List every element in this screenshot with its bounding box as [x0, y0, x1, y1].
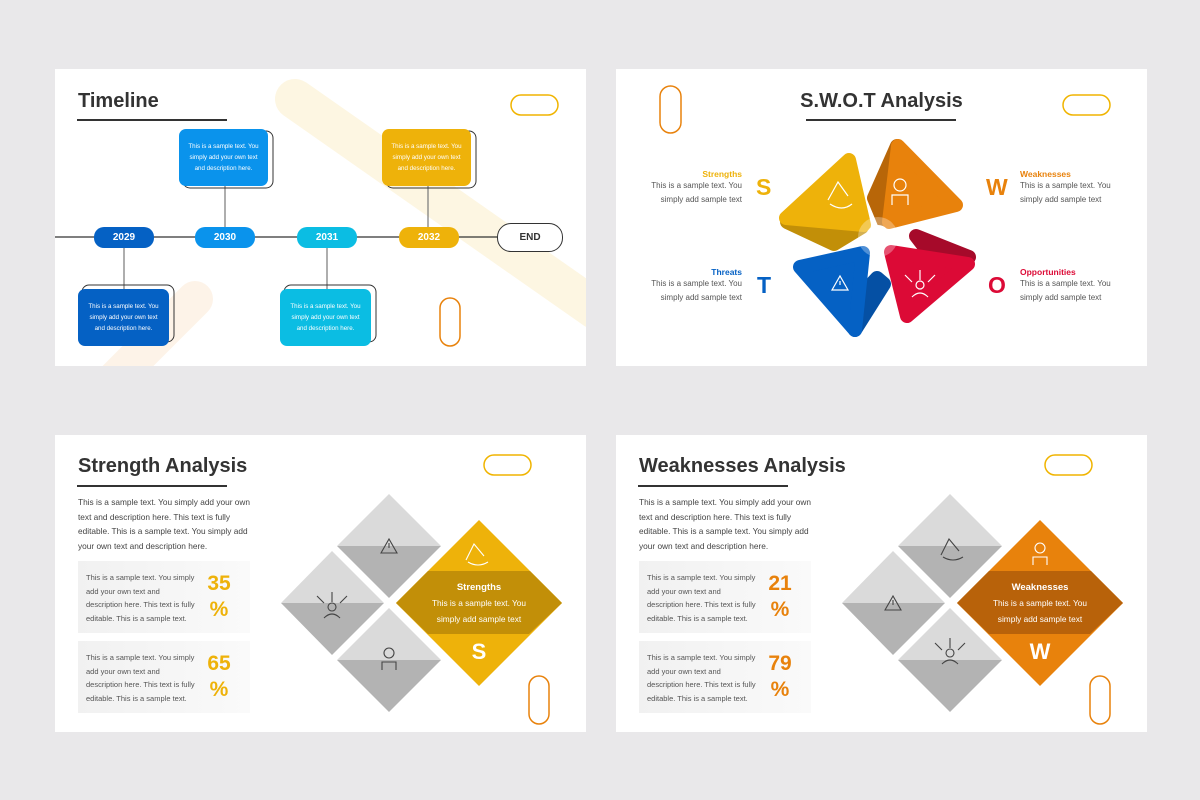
box 2030: [179, 129, 268, 186]
stat box 21%: [639, 561, 811, 633]
stat box 79%: [639, 641, 811, 713]
stat box 35%: 35: [207, 572, 231, 595]
stat box 21%: %: [771, 598, 789, 621]
stat box 21%: description here. This text is fully: [647, 600, 756, 609]
panel: timeline: [55, 69, 586, 366]
diamond text: [993, 582, 1087, 664]
stat box 21%: 21: [768, 572, 792, 595]
stat box 65%: [78, 641, 250, 713]
year 2030: [195, 227, 255, 248]
box 2032: This is a sample text. You simply add your own text and description here.: [391, 143, 462, 172]
threats text: Threats: [711, 267, 742, 277]
stat box 65%: 65: [207, 652, 231, 675]
stat box 21%: editable. This is a sample text.: [647, 614, 748, 622]
stat box 79%: %: [771, 678, 789, 701]
letter S: S: [756, 174, 771, 200]
threats text: This is a sample text. You simply add sample text: [651, 279, 742, 302]
box 2031: This is a sample text. You simply add your own text and description here.: [290, 303, 361, 332]
stat box 35%: %: [210, 598, 228, 621]
box 2029: This is a sample text. You simply add your own text and description here.: [88, 303, 159, 332]
stat box 79%: editable. This is a sample text.: [647, 694, 748, 702]
title: Strength Analysis: [78, 455, 247, 477]
diamond text: W: [1030, 639, 1050, 664]
diamond text: This is a sample text. You simply add sample text: [993, 598, 1087, 624]
box 2032: [382, 129, 471, 186]
stat box 35%: add your own text and: [86, 586, 160, 596]
year 2032: [399, 227, 459, 248]
title: S.W.O.T Analysis: [800, 90, 963, 112]
year 2030: 2030: [214, 232, 236, 243]
weaknesses text: [1020, 169, 1111, 204]
stat box 35%: This is a sample text. You simply: [86, 573, 194, 582]
threats text: [651, 267, 742, 302]
end pill: END: [519, 232, 541, 243]
stat box 35%: description here. This text is fully: [86, 600, 195, 609]
diamond text: [432, 582, 526, 664]
paragraph: This is a sample text. You simply add your own text and description here. This text is fully editable. This is a sample text. You simply add your own text and description here.: [639, 497, 811, 550]
box 2029: [78, 289, 169, 346]
box 2030: This is a sample text. You simply add your own text and description here.: [188, 143, 259, 172]
year 2031: [297, 227, 357, 248]
diamond text: Strengths: [457, 582, 501, 593]
stat box 21%: add your own text and: [647, 586, 721, 596]
stat box 65%: %: [210, 678, 228, 701]
weaknesses text: Weaknesses: [1020, 169, 1071, 179]
title: Weaknesses Analysis: [639, 455, 846, 477]
letter T: T: [757, 272, 771, 298]
stat box 79%: add your own text and: [647, 666, 721, 676]
opportunities text: [1020, 267, 1111, 302]
stat box 35%: editable. This is a sample text.: [86, 614, 187, 622]
stat box 65%: description here. This text is fully: [86, 680, 195, 689]
stat box 79%: 79: [768, 652, 792, 675]
strengths text: This is a sample text. You simply add sample text: [651, 181, 742, 204]
opportunities text: Opportunities: [1020, 267, 1076, 277]
letter W: W: [986, 174, 1008, 200]
stat box 35%: [78, 561, 250, 633]
panel: strength analysis: [55, 435, 586, 732]
year 2032: 2032: [418, 232, 440, 243]
strengths text: Strengths: [702, 169, 742, 179]
stat box 65%: This is a sample text. You simply: [86, 653, 194, 662]
panel: swot: [616, 69, 1147, 366]
year 2031: 2031: [316, 232, 338, 243]
stat box 79%: description here. This text is fully: [647, 680, 756, 689]
strengths text: [651, 169, 742, 204]
stat box 79%: This is a sample text. You simply: [647, 653, 755, 662]
paragraph: This is a sample text. You simply add your own text and description here. This text is fully editable. This is a sample text. You simply add your own text and description here.: [78, 497, 250, 550]
letter O: O: [988, 272, 1006, 298]
diamond text: S: [472, 639, 486, 664]
panel: weaknesses analysis: [616, 435, 1147, 732]
stat box 65%: editable. This is a sample text.: [86, 694, 187, 702]
weaknesses text: This is a sample text. You simply add sample text: [1020, 181, 1111, 204]
diamond text: This is a sample text. You simply add sample text: [432, 598, 526, 624]
opportunities text: This is a sample text. You simply add sample text: [1020, 279, 1111, 302]
stat box 21%: This is a sample text. You simply: [647, 573, 755, 582]
title: Timeline: [78, 90, 159, 112]
year 2029: [94, 227, 154, 248]
year 2029: 2029: [113, 232, 135, 243]
end pill: [497, 223, 563, 252]
stat box 65%: add your own text and: [86, 666, 160, 676]
diamond text: Weaknesses: [1012, 582, 1068, 593]
box 2031: [280, 289, 371, 346]
